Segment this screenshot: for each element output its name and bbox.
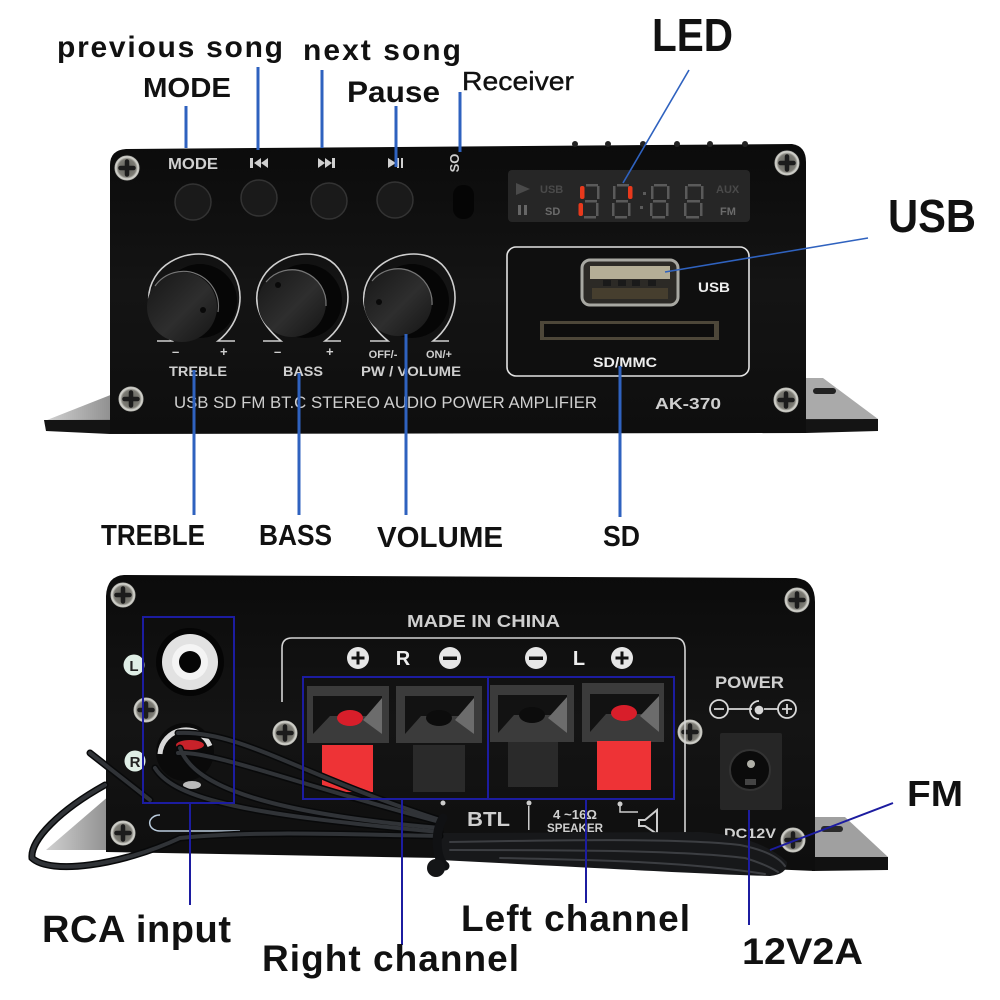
power polarity symbol — [710, 700, 796, 719]
label: Pause: Pause — [347, 76, 440, 109]
L badge — [124, 654, 144, 676]
panel: rear view of amplifier — [32, 575, 888, 877]
label: previous song: previous song — [57, 31, 283, 64]
USB port — [582, 260, 678, 305]
R badge — [124, 750, 146, 772]
impedance marking: 4 ~16Ω — [553, 808, 597, 822]
right mounting flange — [806, 378, 878, 419]
RCA input jacks: R — [130, 754, 141, 771]
RCA input jacks: L — [129, 658, 139, 675]
speaker terminal: left + — [582, 683, 664, 790]
made in china text: MADE IN CHINA — [407, 611, 560, 631]
label: SD: SD — [603, 521, 640, 553]
LED display: SD — [545, 206, 560, 218]
panel: front view of amplifier — [44, 141, 878, 434]
FM antenna cable strands — [32, 733, 785, 877]
LED display — [508, 170, 750, 222]
speaker terminal: left - — [490, 685, 574, 787]
LED display: USB — [540, 184, 563, 196]
knob captions: BASS — [283, 364, 323, 379]
LED display: AUX — [716, 184, 740, 196]
digit 1 — [584, 184, 600, 218]
volume knob — [364, 254, 455, 341]
rear right flange — [812, 817, 888, 857]
speaker outline — [282, 638, 685, 836]
knob captions: – — [274, 344, 281, 359]
MODE marking: MODE — [168, 156, 218, 173]
label: Left channel: Left channel — [461, 898, 690, 939]
label: next song: next song — [303, 34, 461, 67]
digit 3 and 4 — [640, 184, 704, 218]
treble knob — [147, 254, 240, 342]
DC power jack — [720, 733, 782, 810]
rear screws — [110, 582, 810, 853]
impedance marking: SPEAKER — [547, 821, 603, 835]
knob captions: ON/+ — [426, 349, 452, 361]
model number: AK-370 — [655, 396, 721, 413]
impedance marking — [547, 808, 603, 835]
label: VOLUME: VOLUME — [377, 522, 503, 554]
rear left flange — [46, 795, 110, 850]
front body — [110, 144, 806, 433]
bass knob — [257, 254, 348, 341]
polarity markings: L — [573, 648, 585, 670]
digit 2 — [612, 184, 630, 218]
knob captions: – — [172, 344, 179, 359]
knob captions: OFF/- — [369, 349, 398, 361]
label: LED: LED — [652, 9, 733, 61]
knob captions: PW / VOLUME — [361, 364, 461, 379]
highlight box: speaker channels — [303, 677, 674, 799]
knob captions: + — [220, 344, 228, 359]
speaker terminal: right - — [396, 686, 482, 792]
BTL marking: BTL — [467, 809, 510, 831]
top ridges — [572, 141, 748, 147]
polarity markings — [347, 647, 633, 670]
DC rating: DC12V — [724, 825, 777, 841]
power marking: POWER — [715, 673, 784, 692]
LED display: FM — [720, 206, 736, 218]
label: BASS: BASS — [259, 520, 332, 552]
SD marking: SD/MMC — [593, 355, 657, 370]
label: 12V2A: 12V2A — [742, 931, 863, 972]
USB and SD bay — [507, 247, 749, 376]
transport icons — [250, 158, 403, 168]
leader lines — [186, 67, 893, 945]
label: Receiver: Receiver — [462, 66, 574, 96]
SD slot — [540, 321, 719, 340]
rear body — [106, 575, 815, 871]
small logo — [150, 815, 240, 831]
label: TREBLE: TREBLE — [101, 520, 205, 552]
FM antenna cable bundle — [440, 832, 787, 876]
speaker icon — [440, 800, 657, 834]
USB marking: USB — [698, 280, 730, 295]
RCA input jacks — [124, 628, 224, 789]
model line: USB SD FM BT.C STEREO AUDIO POWER AMPLIFIER — [174, 394, 597, 412]
left mounting flange — [47, 394, 113, 420]
knob captions: TREBLE — [169, 364, 227, 379]
polarity markings: R — [396, 648, 411, 670]
buttons — [175, 180, 413, 220]
label: FM: FM — [907, 773, 963, 814]
knob captions — [169, 344, 461, 379]
front screws — [114, 150, 800, 413]
label: RCA input: RCA input — [42, 909, 231, 951]
label: USB: USB — [888, 190, 976, 242]
label: MODE: MODE — [143, 72, 231, 103]
highlight box: RCA input — [143, 617, 234, 803]
IR receiver window — [453, 185, 474, 219]
label: Right channel: Right channel — [262, 938, 519, 979]
knob captions: + — [326, 344, 334, 359]
receiver marking: SO — [447, 154, 462, 172]
flange base strip — [44, 419, 878, 434]
speaker terminal: right + — [307, 686, 389, 792]
